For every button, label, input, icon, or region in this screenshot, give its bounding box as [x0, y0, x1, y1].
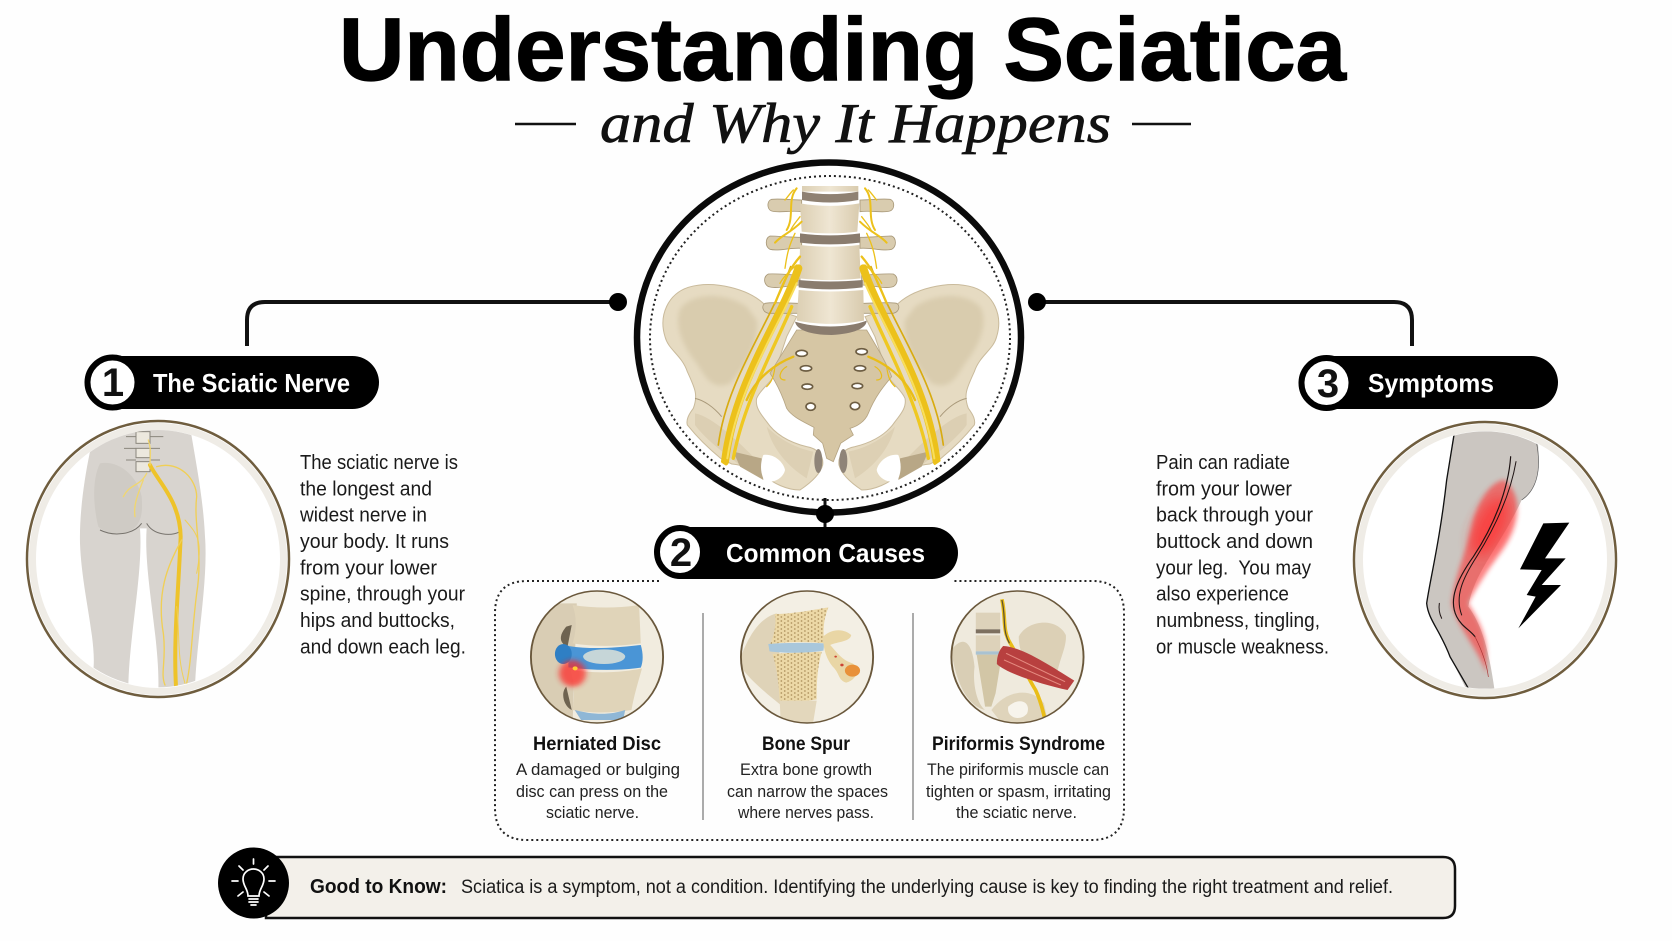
sacrum [770, 330, 892, 462]
text block: symptoms: from your lower [1156, 478, 1292, 500]
pain glow [1452, 480, 1517, 673]
cause text: piriformis syndrome: tighten or spasm, irritating [926, 782, 1111, 801]
cause title: bone spur: Bone Spur [762, 734, 851, 755]
icon: lightning bolt [1518, 523, 1569, 628]
section 3 heading pill: Symptoms [1368, 368, 1494, 398]
lumbar vertebrae [795, 186, 867, 335]
divider [912, 613, 914, 820]
text block: symptoms [1156, 452, 1329, 658]
cause icon: bone spur [741, 591, 873, 727]
cause text: piriformis syndrome [926, 760, 1111, 822]
text block: symptoms: Pain can radiate [1156, 452, 1290, 474]
sacral foramina [796, 349, 867, 410]
good to know callout: Good to Know: [310, 876, 447, 898]
central spine and pelvis illustration [637, 162, 1021, 512]
spine [124, 432, 163, 472]
text block: sciatic nerve: and down each leg. [300, 636, 466, 658]
section 1 heading pill [88, 356, 379, 409]
connector: left [247, 293, 627, 346]
nerves [123, 440, 199, 687]
text block: sciatic nerve: your body. It runs [300, 531, 449, 553]
cause text: piriformis syndrome: The piriformis muscle can [927, 760, 1109, 779]
leg [1427, 430, 1539, 693]
icon: lightbulb [218, 848, 289, 918]
text block: symptoms: or muscle weakness. [1156, 636, 1329, 658]
section 2 heading pill: Common Causes [726, 538, 925, 568]
cause text: bone spur: Extra bone growth [740, 760, 872, 779]
section 1 heading pill: 1 [102, 361, 124, 405]
panel: sciatic nerve illustration [27, 421, 289, 697]
text block: sciatic nerve: the longest and [300, 478, 432, 500]
text block: sciatic nerve: from your lower [300, 557, 437, 579]
text block: sciatic nerve: The sciatic nerve is [300, 452, 458, 474]
cause icon: herniated disc [531, 591, 663, 723]
cause text: herniated disc: disc can press on the [516, 782, 668, 801]
good to know callout: Sciatica is a symptom, not a condition. Identifying the underlying cause is key to finding the right treatment and relief. [461, 877, 1393, 898]
text block: sciatic nerve [299, 452, 466, 658]
subtitle: and Why It Happens [600, 93, 1111, 155]
section 2 heading pill [656, 527, 958, 579]
section 1 heading pill: The Sciatic Nerve [153, 368, 350, 398]
section 2 dashed panel [495, 581, 1124, 840]
divider [702, 613, 704, 820]
cause text: piriformis syndrome: the sciatic nerve. [956, 803, 1077, 822]
legs [80, 427, 206, 690]
connector: right [1028, 293, 1412, 346]
text block: symptoms: buttock and down [1156, 531, 1313, 553]
section 3 heading pill: 3 [1317, 362, 1339, 406]
cause title: piriformis syndrome: Piriformis Syndrome [932, 734, 1105, 755]
cause title: herniated disc: Herniated Disc [533, 734, 661, 755]
nerve lines [1439, 457, 1516, 677]
cause text: bone spur: where nerves pass. [737, 803, 874, 822]
text block: sciatic nerve: widest nerve in [299, 505, 427, 527]
text block: symptoms: numbness, tingling, [1156, 610, 1320, 632]
cause text: herniated disc [516, 760, 680, 822]
text block: sciatic nerve: spine, through your [300, 584, 465, 606]
section 2 heading pill: 2 [670, 531, 692, 575]
text block: symptoms: your leg. You may [1156, 557, 1311, 579]
cause text: herniated disc: A damaged or bulging [516, 760, 680, 779]
cause icon: piriformis syndrome [951, 591, 1084, 723]
cause text: bone spur: can narrow the spaces [727, 782, 888, 801]
cause text: bone spur [727, 760, 888, 822]
text block: symptoms: back through your [1156, 505, 1313, 527]
connector: bottom [816, 498, 834, 532]
panel: symptoms illustration [1354, 422, 1616, 698]
cause text: herniated disc: sciatic nerve. [546, 803, 639, 822]
text block: sciatic nerve: hips and buttocks, [300, 610, 455, 632]
section 3 heading pill [1300, 356, 1558, 409]
text block: symptoms: also experience [1156, 584, 1289, 606]
good to know callout [218, 848, 1455, 918]
title: Understanding Sciatica [339, 0, 1348, 99]
